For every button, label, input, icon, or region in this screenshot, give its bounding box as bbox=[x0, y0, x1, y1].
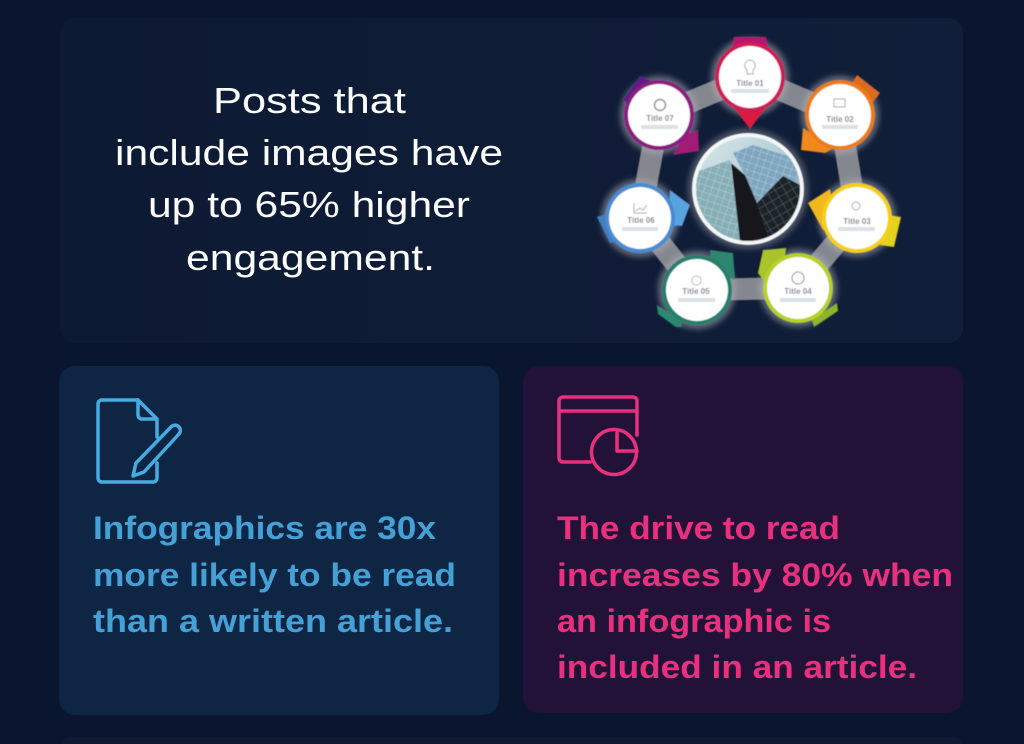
ring connector bbox=[640, 77, 857, 290]
step: Title 03 bbox=[808, 179, 901, 257]
step: Title 07 bbox=[620, 76, 699, 155]
text: drive to read 80% bbox=[557, 510, 953, 685]
step: Title 05: Title 05 bbox=[682, 287, 710, 296]
step: Title 02: Title 02 bbox=[826, 115, 854, 124]
panel: next section edge bbox=[62, 737, 963, 744]
text: drive to read 80%: an infographic is bbox=[557, 603, 831, 639]
step: Title 07: Title 07 bbox=[646, 114, 674, 123]
step: Title 06: Title 06 bbox=[627, 216, 655, 225]
heading: posts with images bbox=[115, 80, 503, 278]
step: Title 05 bbox=[657, 250, 736, 329]
icon: document and pencil bbox=[98, 400, 180, 482]
step: Title 04: Title 04 bbox=[784, 287, 812, 296]
text: infographics 30x: Infographics are 30x bbox=[93, 510, 436, 546]
chart: seven-step circular diagram bbox=[597, 37, 901, 329]
step: Title 06 bbox=[597, 179, 690, 257]
step: Title 03: Title 03 bbox=[843, 217, 871, 226]
heading: posts with images: Posts that bbox=[213, 80, 406, 121]
panel: infographics read bbox=[59, 366, 499, 715]
text: drive to read 80%: included in an article. bbox=[557, 649, 917, 685]
panel: images engagement bbox=[60, 18, 963, 343]
text: infographics 30x: more likely to be read bbox=[93, 557, 456, 593]
heading: posts with images: include images have bbox=[115, 132, 503, 173]
panel: drive to read bbox=[523, 366, 963, 713]
text: drive to read 80%: The drive to read bbox=[557, 510, 840, 546]
text: drive to read 80%: increases by 80% when bbox=[557, 557, 953, 593]
step: Title 01 bbox=[711, 37, 789, 129]
center photo bbox=[688, 129, 808, 249]
text: infographics 30x: than a written article. bbox=[93, 603, 453, 639]
text: infographics 30x bbox=[93, 510, 456, 639]
step: Title 02 bbox=[801, 75, 880, 154]
step: Title 04 bbox=[758, 248, 838, 327]
heading: posts with images: up to 65% higher bbox=[148, 184, 470, 225]
heading: posts with images: engagement. bbox=[186, 237, 435, 278]
step: Title 01: Title 01 bbox=[736, 79, 764, 88]
icon: browser window with pie chart bbox=[559, 397, 637, 474]
